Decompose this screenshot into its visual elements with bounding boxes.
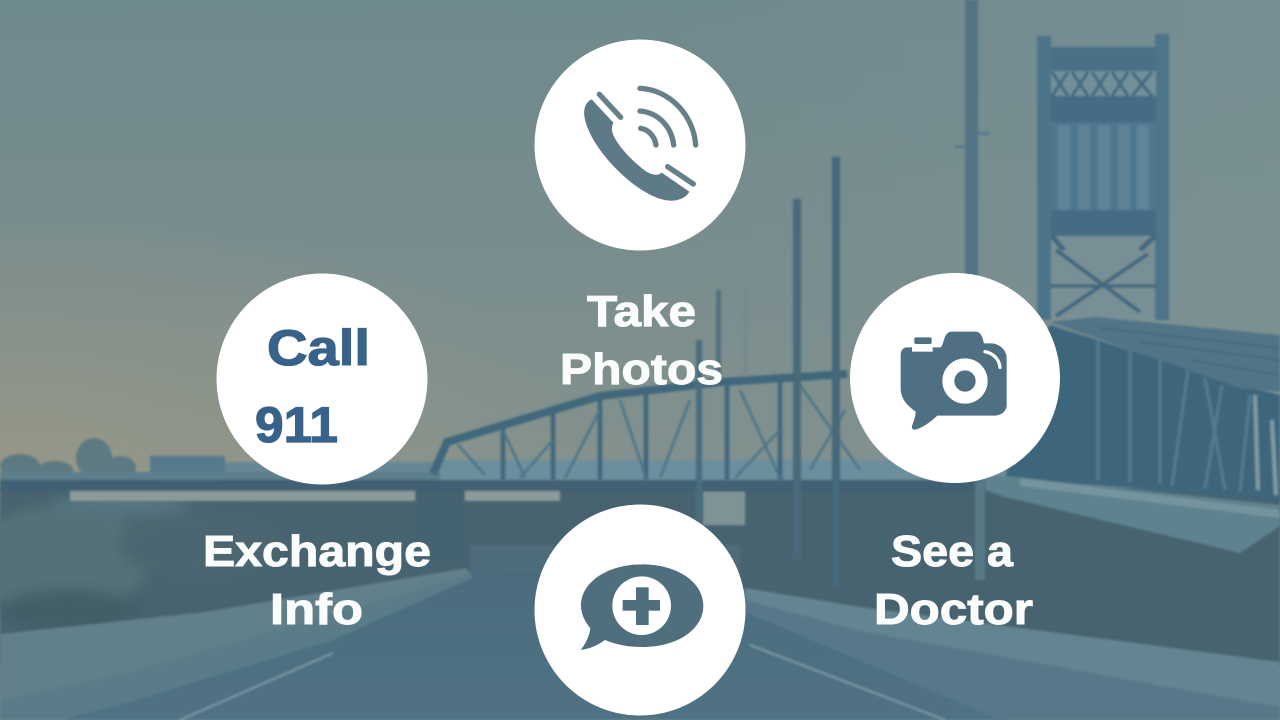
left road barrier	[0, 568, 472, 720]
text: 911: 911	[255, 397, 338, 453]
main bridge deck	[0, 480, 1010, 561]
icon: speech bubble with medical cross	[581, 564, 703, 650]
label: See a Doctor: See a	[891, 527, 1014, 576]
circle: camera	[850, 273, 1060, 483]
dark ground and foliage	[0, 488, 1280, 668]
step: see a doctor camera icon	[850, 273, 1060, 483]
text: Call: Call	[267, 320, 370, 376]
label: Exchange Info: Exchange	[203, 527, 431, 576]
circle: medical	[534, 504, 746, 716]
circle: phone	[534, 40, 746, 250]
step: call 911	[216, 274, 428, 484]
steel truss span	[433, 374, 860, 480]
label: Take Photos: Take	[587, 287, 696, 336]
utility poles	[696, 0, 990, 587]
step: take photos phone icon	[534, 40, 746, 250]
lift bridge tower	[1037, 34, 1169, 320]
label: Take Photos	[560, 287, 723, 394]
label: Take Photos: Photos	[560, 345, 723, 394]
label: See a Doctor: Doctor	[874, 585, 1033, 634]
distant trees and buildings	[0, 438, 1010, 482]
label: See a Doctor	[874, 527, 1033, 634]
right road barrier	[745, 588, 1280, 720]
icon: phone with signal waves	[584, 88, 696, 201]
right truss bridge section	[985, 317, 1280, 553]
circle: call 911	[216, 274, 428, 484]
icon: camera speech bubble	[901, 332, 1007, 430]
label: Exchange Info	[203, 527, 431, 634]
label: Exchange Info: Info	[270, 585, 363, 634]
step: exchange info medical icon	[534, 504, 746, 716]
sky	[0, 0, 1280, 500]
road	[60, 572, 1010, 720]
